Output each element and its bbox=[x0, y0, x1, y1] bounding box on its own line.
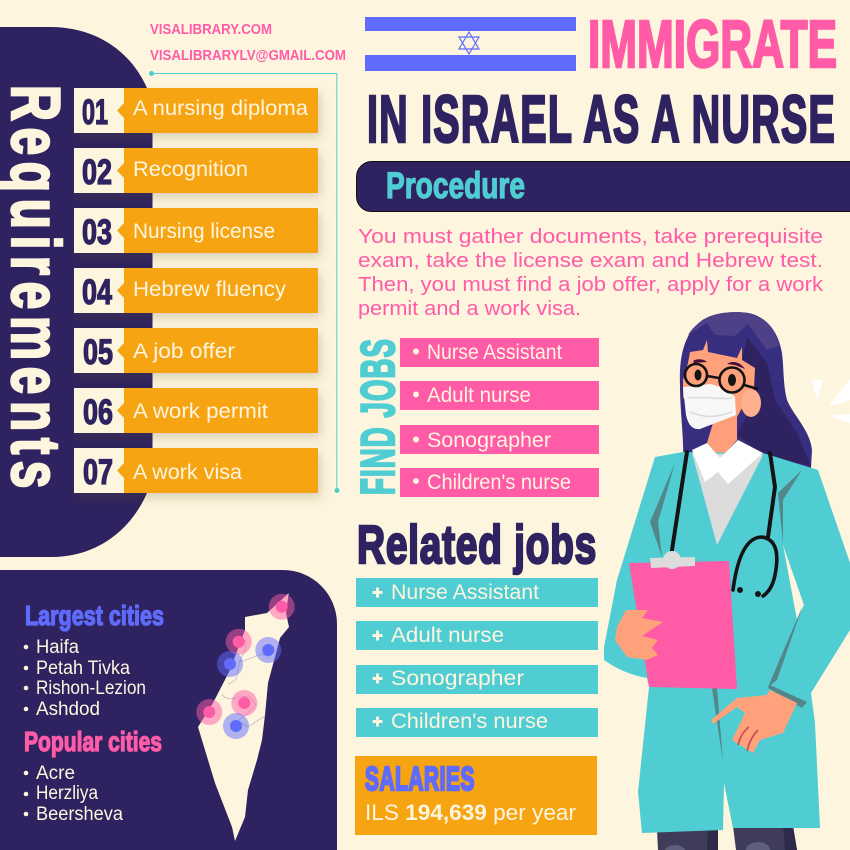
text block: procedure description: exam, take the license exam and Hebrew test. bbox=[358, 250, 823, 272]
panel: requirements bbox=[0, 27, 152, 557]
item 04: Hebrew fluency bbox=[133, 277, 286, 301]
arm gap bbox=[783, 545, 804, 620]
find jobs list: Sonographer bbox=[427, 428, 551, 452]
find jobs list bbox=[413, 340, 571, 494]
coat shadows bbox=[650, 463, 807, 762]
list: largest cities: Petah Tivka bbox=[36, 658, 130, 679]
panel: procedure heading bbox=[356, 162, 850, 212]
item 05: 05 bbox=[83, 333, 113, 372]
item 02 bbox=[74, 148, 318, 193]
item 05 bbox=[74, 328, 318, 373]
list: popular cities bbox=[24, 763, 123, 825]
list: related jobs: Adult nurse bbox=[391, 623, 504, 647]
text block: procedure description: permit and a work visa. bbox=[358, 298, 581, 320]
heading: popular cities: Popular cities bbox=[24, 726, 162, 757]
item 05: A job offer bbox=[133, 339, 235, 363]
title bbox=[367, 7, 837, 157]
item 03: Nursing license bbox=[133, 219, 275, 243]
ear bbox=[741, 389, 761, 417]
face bbox=[683, 340, 755, 428]
item 02: Recognition bbox=[133, 157, 248, 181]
mask bbox=[683, 384, 736, 429]
text block: procedure description bbox=[358, 226, 824, 320]
list: popular cities: Beersheva bbox=[36, 804, 123, 825]
item 03: 03 bbox=[82, 213, 112, 252]
item 06 bbox=[74, 388, 318, 433]
clipboard bbox=[629, 551, 737, 689]
item 07 bbox=[74, 448, 318, 493]
list: related jobs: Children's nurse bbox=[391, 709, 548, 733]
heading: find jobs: FIND JOBS bbox=[351, 338, 404, 495]
item 04: 04 bbox=[82, 273, 112, 312]
item 01: A nursing diploma bbox=[133, 96, 308, 120]
hair bbox=[680, 312, 812, 468]
item 01: 01 bbox=[82, 93, 108, 132]
item 02: 02 bbox=[82, 153, 112, 192]
list: popular cities: Herzliya bbox=[36, 783, 98, 804]
item 03 bbox=[74, 208, 318, 253]
panel: procedure heading: Procedure bbox=[386, 165, 525, 206]
item 06: A work permit bbox=[133, 399, 268, 423]
coat bbox=[604, 452, 850, 833]
list: related jobs: Sonographer bbox=[391, 666, 524, 690]
legs bbox=[657, 826, 797, 850]
panel: salaries bbox=[355, 756, 597, 835]
list: largest cities: Haifa bbox=[36, 637, 79, 658]
neck bbox=[707, 417, 737, 459]
requirements list bbox=[74, 88, 318, 493]
shirt bbox=[692, 453, 763, 545]
right hand bbox=[711, 690, 797, 753]
icon: white burst bbox=[812, 379, 850, 423]
list: related jobs bbox=[356, 578, 598, 737]
glasses bbox=[685, 364, 758, 392]
panel: cities bbox=[0, 570, 337, 850]
contact details: VISALIBRARYLV@GMAIL.COM bbox=[150, 48, 346, 64]
contact details bbox=[150, 22, 346, 64]
left hand bbox=[615, 610, 663, 660]
item 04 bbox=[74, 268, 318, 313]
map: Israel bbox=[196, 593, 295, 841]
panel: find jobs bbox=[351, 338, 599, 497]
panel: salaries: ILS 194,639 per year bbox=[365, 800, 576, 825]
list: largest cities: Ashdod bbox=[36, 699, 100, 720]
heading: largest cities: Largest cities bbox=[25, 600, 164, 631]
icon: Israeli flag bbox=[365, 17, 576, 71]
find jobs list: Nurse Assistant bbox=[427, 340, 562, 364]
find jobs list: Adult nurse bbox=[427, 383, 531, 407]
list: related jobs: Nurse Assistant bbox=[391, 580, 539, 604]
list: popular cities: Acre bbox=[36, 763, 75, 784]
collar bbox=[692, 440, 763, 484]
connector line bbox=[149, 71, 340, 493]
text block: procedure description: Then, you must find a job offer, apply for a work bbox=[358, 274, 824, 296]
heading: related jobs: Related jobs bbox=[357, 515, 597, 575]
panel: salaries: SALARIES bbox=[365, 760, 475, 797]
item 07: A work visa bbox=[133, 460, 242, 484]
contact details: VISALIBRARY.COM bbox=[150, 22, 272, 38]
item 07: 07 bbox=[83, 453, 113, 492]
find jobs list: Children's nurse bbox=[427, 470, 571, 494]
list: largest cities: Rishon-Lezion bbox=[36, 678, 146, 699]
stethoscope bbox=[672, 452, 777, 596]
text block: procedure description: You must gather documents, take prerequisite bbox=[358, 226, 823, 248]
illustration: nurse bbox=[604, 312, 850, 850]
list: largest cities bbox=[24, 637, 146, 720]
eyes and brows bbox=[693, 359, 745, 386]
item 01 bbox=[74, 88, 318, 133]
item 06: 06 bbox=[83, 393, 113, 432]
